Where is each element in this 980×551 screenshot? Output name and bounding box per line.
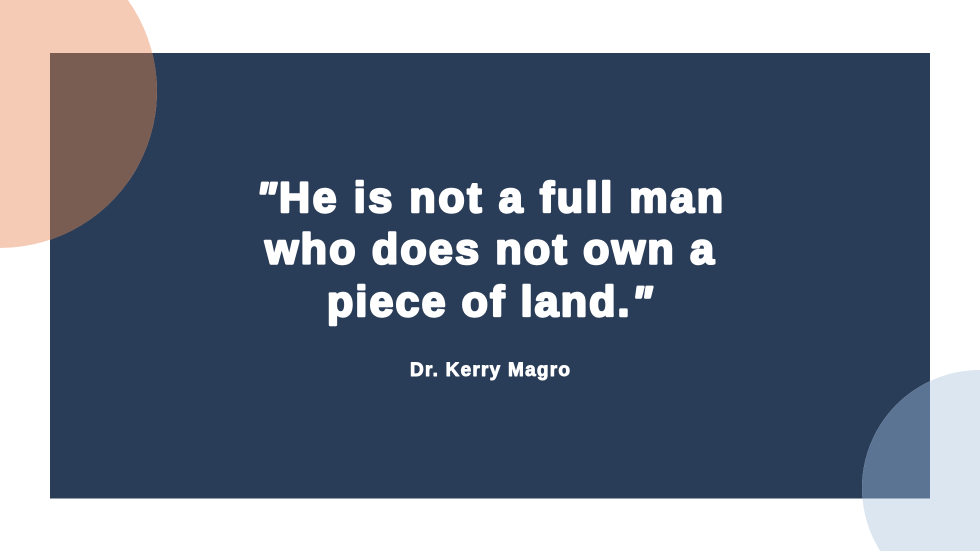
quote line 2: who does not own a <box>264 226 715 274</box>
peach circle, top left <box>0 0 157 248</box>
quote text <box>256 174 723 326</box>
quote line 3: piece of land." <box>327 278 653 326</box>
navy panel <box>50 53 930 498</box>
attribution: Dr. Kerry Magro <box>410 360 570 381</box>
quote line 1: "He is not a full man <box>256 174 723 222</box>
pale blue circle, bottom right <box>862 370 980 551</box>
